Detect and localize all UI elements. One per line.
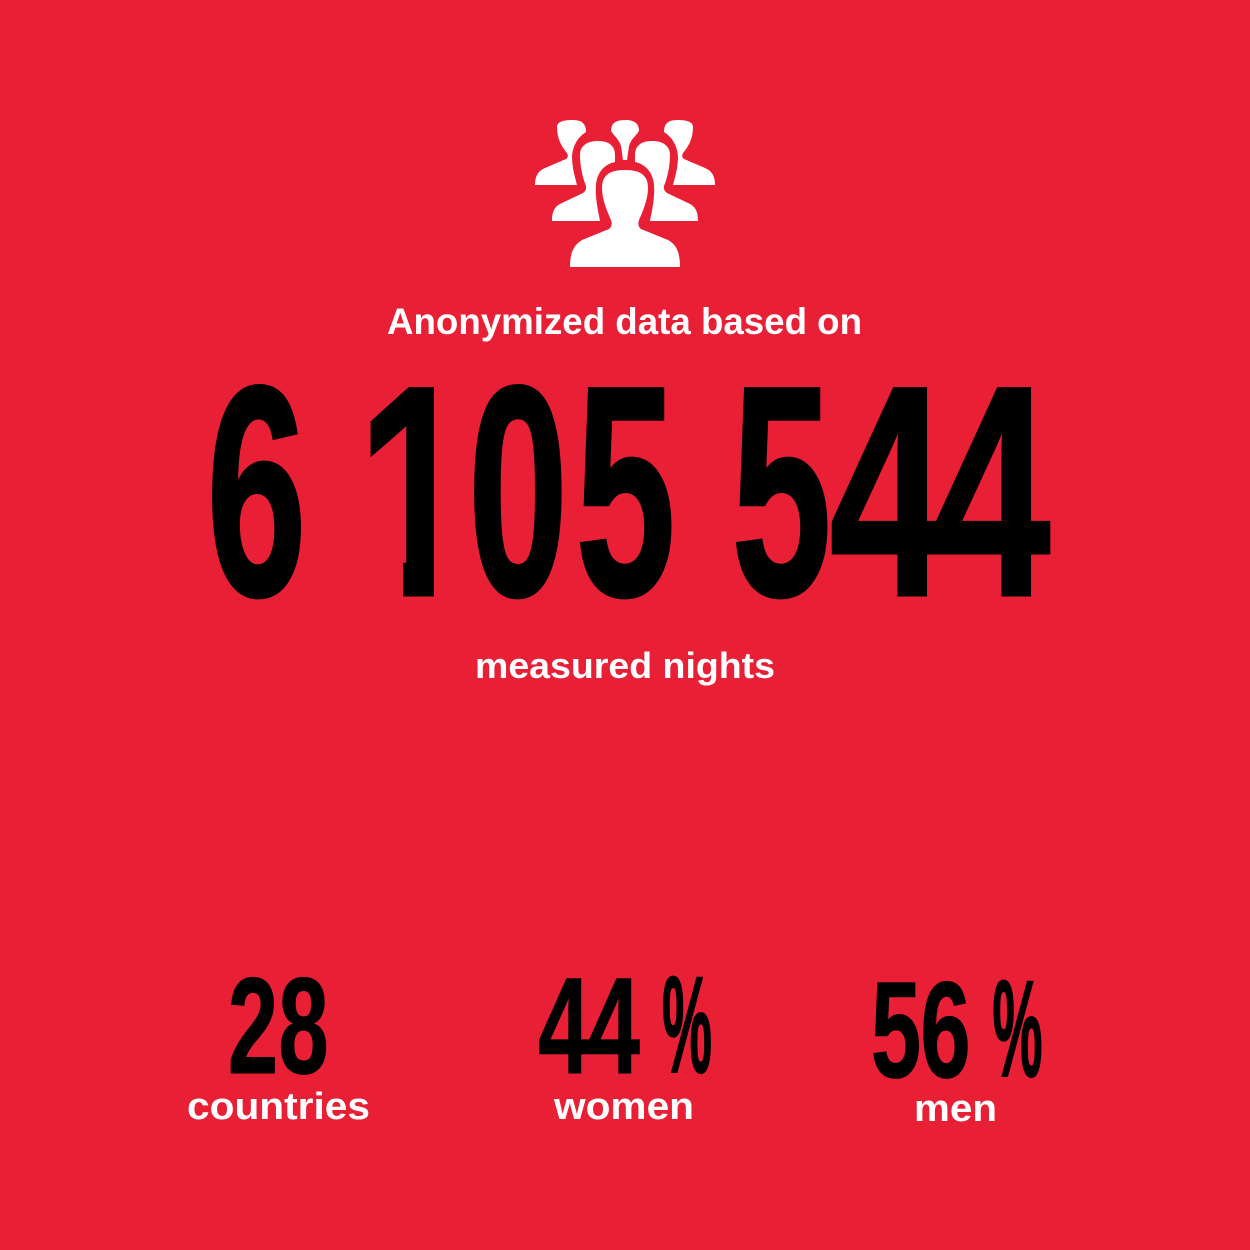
stat: 28 countries: 8 [278, 949, 329, 1103]
stat: 56 % men: % [993, 953, 1042, 1106]
stat: 56 % men: 5 [871, 953, 921, 1107]
stat: 28 countries: countries [187, 1086, 370, 1128]
big number: 6 105 544 [212, 384, 1050, 600]
big number: 6 105 544: 0 [468, 325, 568, 659]
stat: 56 % men [871, 953, 1042, 1130]
big number: 6 105 544: 1 [357, 324, 477, 659]
stat: 44 % women: women [553, 1086, 694, 1128]
big number: 6 105 544: 4 [830, 324, 948, 659]
big number: 6 105 544: 4 [934, 324, 1052, 659]
stat: 56 % men: 6 [920, 953, 971, 1107]
big number: 6 105 544: 5 [731, 325, 832, 659]
heading: Anonymized data based on: Anonymized data based on [387, 301, 862, 342]
icon: group of people [535, 120, 715, 267]
stat: 44 % women: 4 [538, 949, 590, 1102]
big number: 6 105 544: 6 [206, 325, 307, 659]
stat: 28 countries: 2 [228, 949, 278, 1103]
caption: measured nights: measured nights [475, 645, 775, 686]
stat: 44 % women: % [662, 949, 712, 1102]
stat: 44 % women: 4 [588, 949, 640, 1102]
stat: 28 countries [187, 949, 370, 1128]
stat: 56 % men: men [914, 1088, 997, 1130]
big number: 6 105 544: 5 [575, 325, 676, 659]
stat: 44 % women [538, 949, 712, 1128]
